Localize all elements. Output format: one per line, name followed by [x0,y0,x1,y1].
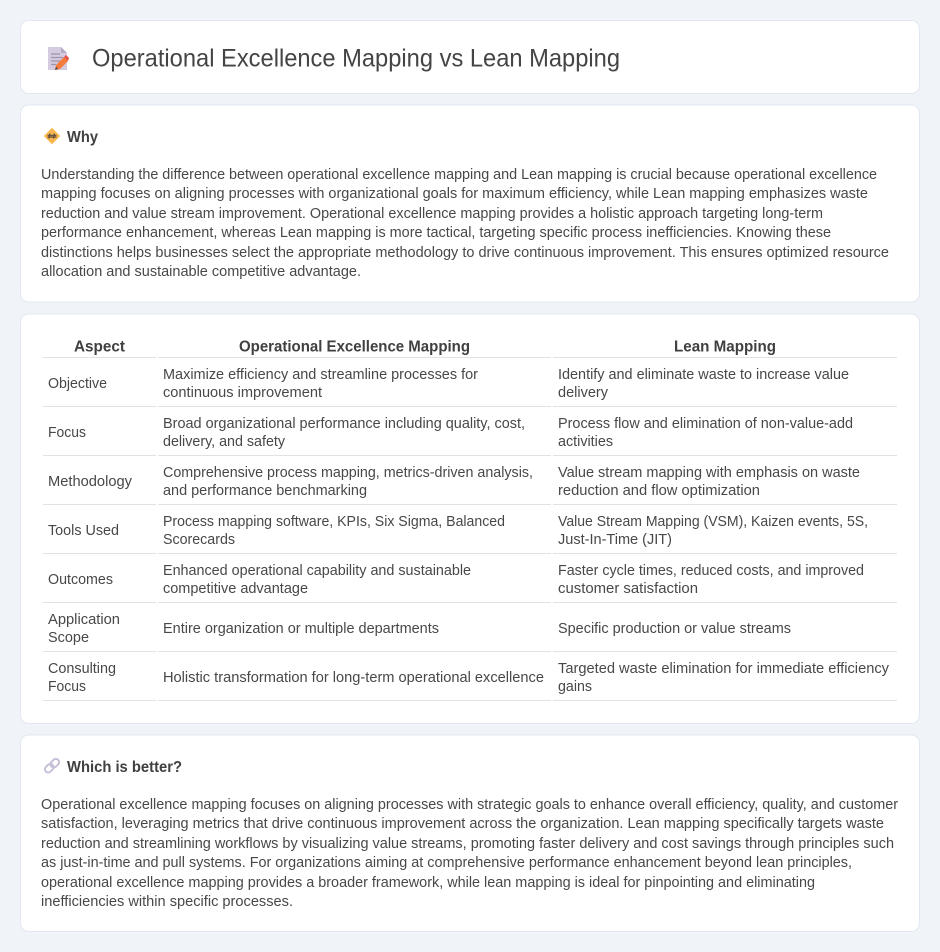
panel: why [20,105,920,302]
icon: memo with pencil [48,47,69,70]
table row: objective: Maximize efficiency and streamline processes for [163,367,478,383]
table row: objective: Identify and eliminate waste to increase value [558,367,849,383]
table row: tools used: Value Stream Mapping (VSM), Kaizen events, 5S, [558,514,868,530]
heading: which is better: Which is better? [67,759,182,776]
table row: objective: Objective [48,376,107,392]
table row: application scope: Application [48,612,120,628]
table row: focus: Focus [48,425,86,441]
text block: which is better paragraph [41,797,898,910]
text block: why paragraph: reduction and value stream improvement. Operational excellence mapping provides a holistic approach targeting long-term [41,206,823,222]
panel: which is better [20,735,920,932]
panel: title header [20,20,920,94]
table row: application scope: Specific production or value streams [558,621,791,637]
table row: tools used: Process mapping software, KPIs, Six Sigma, Balanced [163,514,505,530]
table row: tools used [43,514,897,554]
table row: objective: continuous improvement [163,385,322,401]
table row: application scope: Scope [48,630,89,646]
table row: outcomes: Enhanced operational capability and sustainable [163,563,471,579]
table row: methodology: Comprehensive process mapping, metrics-driven analysis, [163,465,533,481]
table row: methodology: reduction and flow optimization [558,483,760,499]
icon: warning diamond [44,128,60,144]
table header row: Lean Mapping [674,338,776,356]
panel: comparison table [20,314,920,724]
table row: methodology [43,465,897,505]
table row: application scope [43,612,897,652]
text block: which is better paragraph: operational excellence mapping provides a broader framework, while lean mapping is ideal for pinpointing and eliminating [41,875,815,891]
text block: why paragraph: performance enhancement, whereas Lean mapping is more tactical, targeting specific process inefficiencies. Knowing these [41,225,831,241]
table row: methodology: Value stream mapping with emphasis on waste [558,465,860,481]
table row: methodology: Methodology [48,474,133,490]
title: Operational Excellence Mapping vs Lean Mapping [92,44,620,72]
table row: consulting focus [43,661,897,701]
table row: outcomes [43,563,897,603]
table header row: Aspect [74,338,126,356]
heading: why: Why [67,129,98,146]
text block: which is better paragraph: inefficiencies within specific processes. [41,894,293,910]
table header row [43,338,897,358]
text block: which is better paragraph: reduction and streamlining workflows by visualizing value streams, promoting faster delivery and cost savings through principles such [41,836,894,852]
table row: application scope: Entire organization or multiple departments [163,621,439,637]
table row: tools used: Tools Used [48,523,119,539]
table row: objective [43,367,897,407]
table row: focus: delivery, and safety [163,434,286,450]
table row: consulting focus: gains [558,679,592,695]
text block: which is better paragraph: satisfaction, leveraging metrics that drive continuous improvement across the organization. Lean mapping specifically targets waste [41,816,884,832]
table row: focus [43,416,897,456]
table row: outcomes: competitive advantage [163,581,308,597]
table row: outcomes: Faster cycle times, reduced costs, and improved [558,563,864,579]
table row: focus: Broad organizational performance including quality, cost, [163,416,525,432]
text block: why paragraph [41,167,889,280]
text block: which is better paragraph: Operational excellence mapping focuses on aligning processes with strategic goals to enhance overall efficiency, quality, and customer [41,797,898,813]
table header row: Operational Excellence Mapping [239,338,470,356]
text block: which is better paragraph: as just-in-time and pull systems. For organizations aiming at comprehensive performance enhancement beyond lean principles, [41,855,852,871]
table row: consulting focus: Holistic transformation for long-term operational excellence [163,670,544,686]
table row: consulting focus: Consulting [48,661,116,677]
table row: outcomes: Outcomes [48,572,113,588]
table row: tools used: Just-In-Time (JIT) [558,532,672,548]
text block: why paragraph: Understanding the difference between operational excellence mapping and Lean mapping is crucial because operational excellence [41,167,877,183]
text block: why paragraph: allocation and sustainable competitive advantage. [41,264,361,280]
table row: outcomes: customer satisfaction [558,581,698,597]
table row: tools used: Scorecards [163,532,235,548]
table row: objective: delivery [558,385,609,401]
text block: why paragraph: distinctions helps businesses select the appropriate methodology to drive continuous improvement. This ensures optimized resource [41,245,889,261]
table row: focus: activities [558,434,613,450]
icon: chain link [44,758,60,774]
table row: methodology: and performance benchmarking [163,483,367,499]
table row: consulting focus: Focus [48,679,86,695]
text block: why paragraph: mapping focuses on aligning processes with organizational goals for maximum efficiency, while Lean mapping emphasizes waste [41,186,868,202]
table row: consulting focus: Targeted waste elimination for immediate efficiency [558,661,890,677]
table row: focus: Process flow and elimination of non-value-add [558,416,853,432]
